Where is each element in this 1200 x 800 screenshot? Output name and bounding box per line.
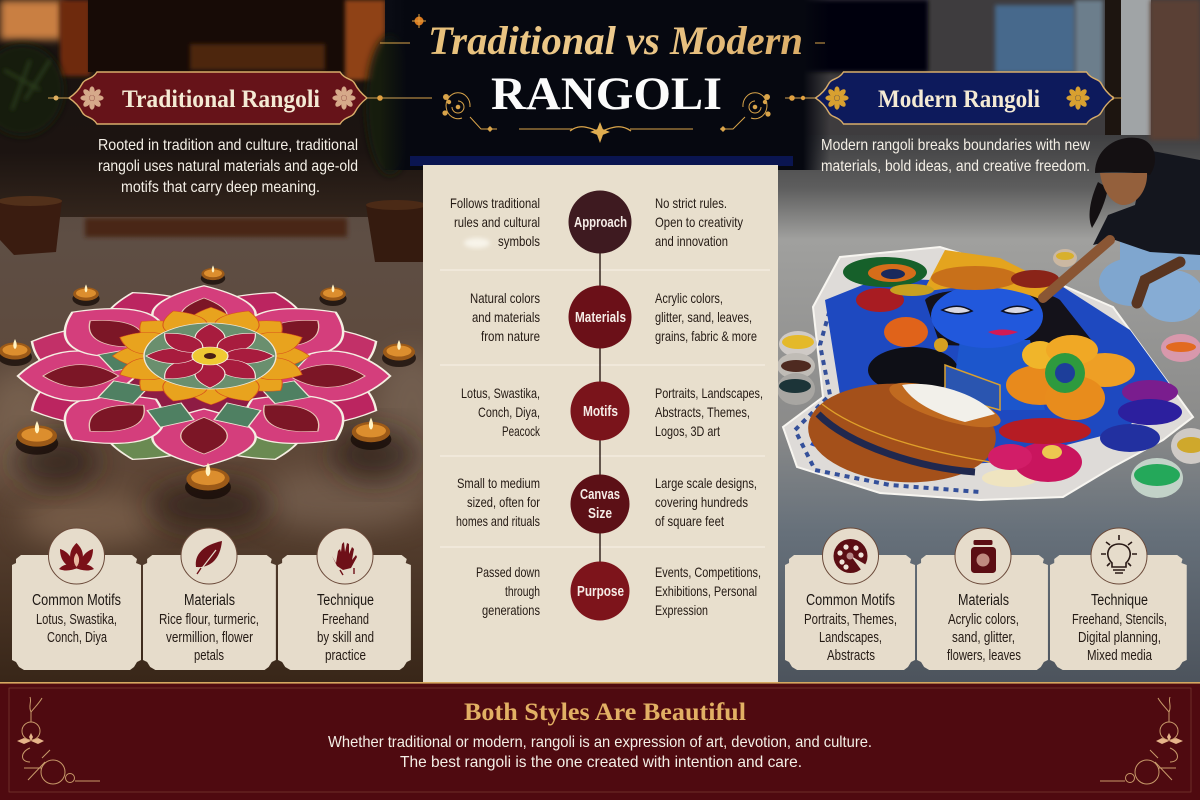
orange flower [1006,335,1135,420]
icon: light bulb [1101,535,1137,573]
card: modern common motifs [785,528,915,670]
corner ornament right [1100,697,1183,784]
ear ornaments [856,284,948,352]
card: modern technique [1050,528,1187,670]
diya lamps [0,265,416,499]
badge: modern rangoli: Modern Rangoli [878,86,1040,113]
title ornaments [380,14,825,143]
row: canvas size: homes and rituals [456,513,540,529]
panel: comparison table [423,165,778,683]
row: canvas size: Small to medium [457,475,540,491]
row: purpose: Exhibitions, Personal [655,583,757,599]
badge: traditional rangoli: Traditional Rangoli [122,86,320,113]
text: traditional description: motifs that carry deep meaning. [121,179,320,196]
card: traditional materials: vermillion, flower [166,629,253,646]
card: traditional technique [278,528,411,670]
row: motifs: Logos, 3D art [655,423,720,439]
color bowls [777,249,1200,498]
row: motifs: Peacock [502,423,541,439]
row: purpose: through [505,583,540,599]
title [428,18,803,120]
text: modern description: Modern rangoli breaks boundaries with new [821,137,1090,154]
row: purpose: Passed down [476,564,540,580]
row: materials: from nature [481,328,540,344]
card: modern technique: Mixed media [1087,647,1152,664]
card: modern materials: sand, glitter, [952,629,1015,646]
row: approach: Open to creativity [655,214,743,230]
row: canvas size: Size [588,506,612,522]
title: RANGOLI [491,68,722,120]
footer text: The best rangoli is the one created with intention and care. [400,754,802,771]
card: modern technique: Technique [1091,592,1148,609]
card: modern technique: Digital planning, [1078,629,1161,646]
wall and doorway [0,0,425,237]
rangoli art: portrait with pot [783,247,1193,500]
card: modern common motifs: Portraits, Themes, [804,611,897,628]
row: approach: Approach [574,215,627,231]
badge: modern rangoli [785,72,1122,124]
card: traditional common motifs: Conch, Diya [47,629,107,646]
row: purpose: Expression [655,602,708,618]
card: traditional materials: Rice flour, turmeric, [159,611,259,628]
text: traditional description: rangoli uses natural materials and age-old [98,158,358,175]
corner ornament left [17,697,100,784]
row: canvas size: sized, often for [467,494,540,510]
panel: center header background [380,0,830,170]
icon: hand [332,542,357,575]
row: materials: and materials [472,309,540,325]
card: traditional technique: Freehand [322,611,369,628]
row: motifs: Lotus, Swastika, [461,385,540,401]
row: canvas size: Large scale designs, [655,475,757,491]
pink and purple flowers [982,380,1182,487]
row: approach: Follows traditional [450,195,540,211]
icon: palette [834,539,868,573]
card: modern common motifs: Abstracts [827,647,875,664]
panel: modern rangoli scene [777,0,1200,684]
card: traditional materials: petals [194,647,224,664]
card: modern technique: Freehand, Stencils, [1072,611,1167,628]
card: traditional materials: Materials [184,592,235,609]
row: materials [470,286,757,348]
card: traditional common motifs: Common Motifs [32,592,121,609]
row: materials: Natural colors [470,290,540,306]
card: modern common motifs: Landscapes, [819,629,882,646]
title: Traditional vs Modern [428,18,803,63]
card: traditional technique: Technique [317,592,374,609]
row: materials: grains, fabric & more [655,328,757,344]
footer heading: Both Styles Are Beautiful [464,699,746,726]
row: canvas size: Canvas [580,487,620,503]
card: traditional technique: by skill and [317,629,374,646]
text: modern description: materials, bold ideas, and creative freedom. [821,158,1090,175]
card: traditional common motifs: Lotus, Swastika, [36,611,117,628]
card: modern materials: Acrylic colors, [948,611,1019,628]
row: motifs: Portraits, Landscapes, [655,385,763,401]
row: motifs: Conch, Diya, [478,404,540,420]
row: materials: glitter, sand, leaves, [655,309,752,325]
row: purpose: Purpose [577,584,624,600]
row: canvas size: covering hundreds [655,494,748,510]
card: modern materials [917,528,1048,670]
card: modern materials: Materials [958,592,1009,609]
footer text [328,734,872,771]
rangoli mandala [12,283,396,469]
row: approach: symbols [498,233,540,249]
row: motifs [461,382,763,440]
row: purpose [476,562,761,620]
card: traditional materials [143,528,276,670]
row: purpose: Events, Competitions, [655,564,761,580]
row: purpose: generations [482,602,540,618]
artist kneeling [1043,138,1200,322]
text: traditional description [98,137,358,196]
card: modern materials: flowers, leaves [947,647,1021,664]
row: approach: No strict rules. [655,195,727,211]
row: materials: Acrylic colors, [655,290,723,306]
card: modern common motifs: Common Motifs [806,592,895,609]
card: traditional common motifs [12,528,141,670]
plant and pots [0,35,426,262]
background wall and window [778,0,1200,140]
row: approach [450,190,743,254]
footer banner [0,682,1200,800]
text: modern description [821,137,1090,175]
row: materials: Materials [575,310,626,326]
icon: lotus [59,543,94,571]
footer text: Whether traditional or modern, rangoli is an expression of art, devotion, and culture. [328,734,872,751]
clay pot [805,374,1005,488]
floor light patches [0,350,452,548]
row: canvas size [456,474,757,534]
row: approach: and innovation [655,233,728,249]
text: traditional description: Rooted in tradition and culture, traditional [98,137,358,154]
row: approach: rules and cultural [454,214,540,230]
icon: jar [971,540,996,573]
row: canvas size: of square feet [655,513,724,529]
panel: traditional rangoli scene [0,0,452,684]
badge: traditional rangoli [48,72,410,124]
card: traditional technique: practice [325,647,366,664]
peacock feather [843,257,927,287]
icon: leaf [196,541,222,574]
row: motifs: Abstracts, Themes, [655,404,750,420]
row: motifs: Motifs [583,404,618,420]
